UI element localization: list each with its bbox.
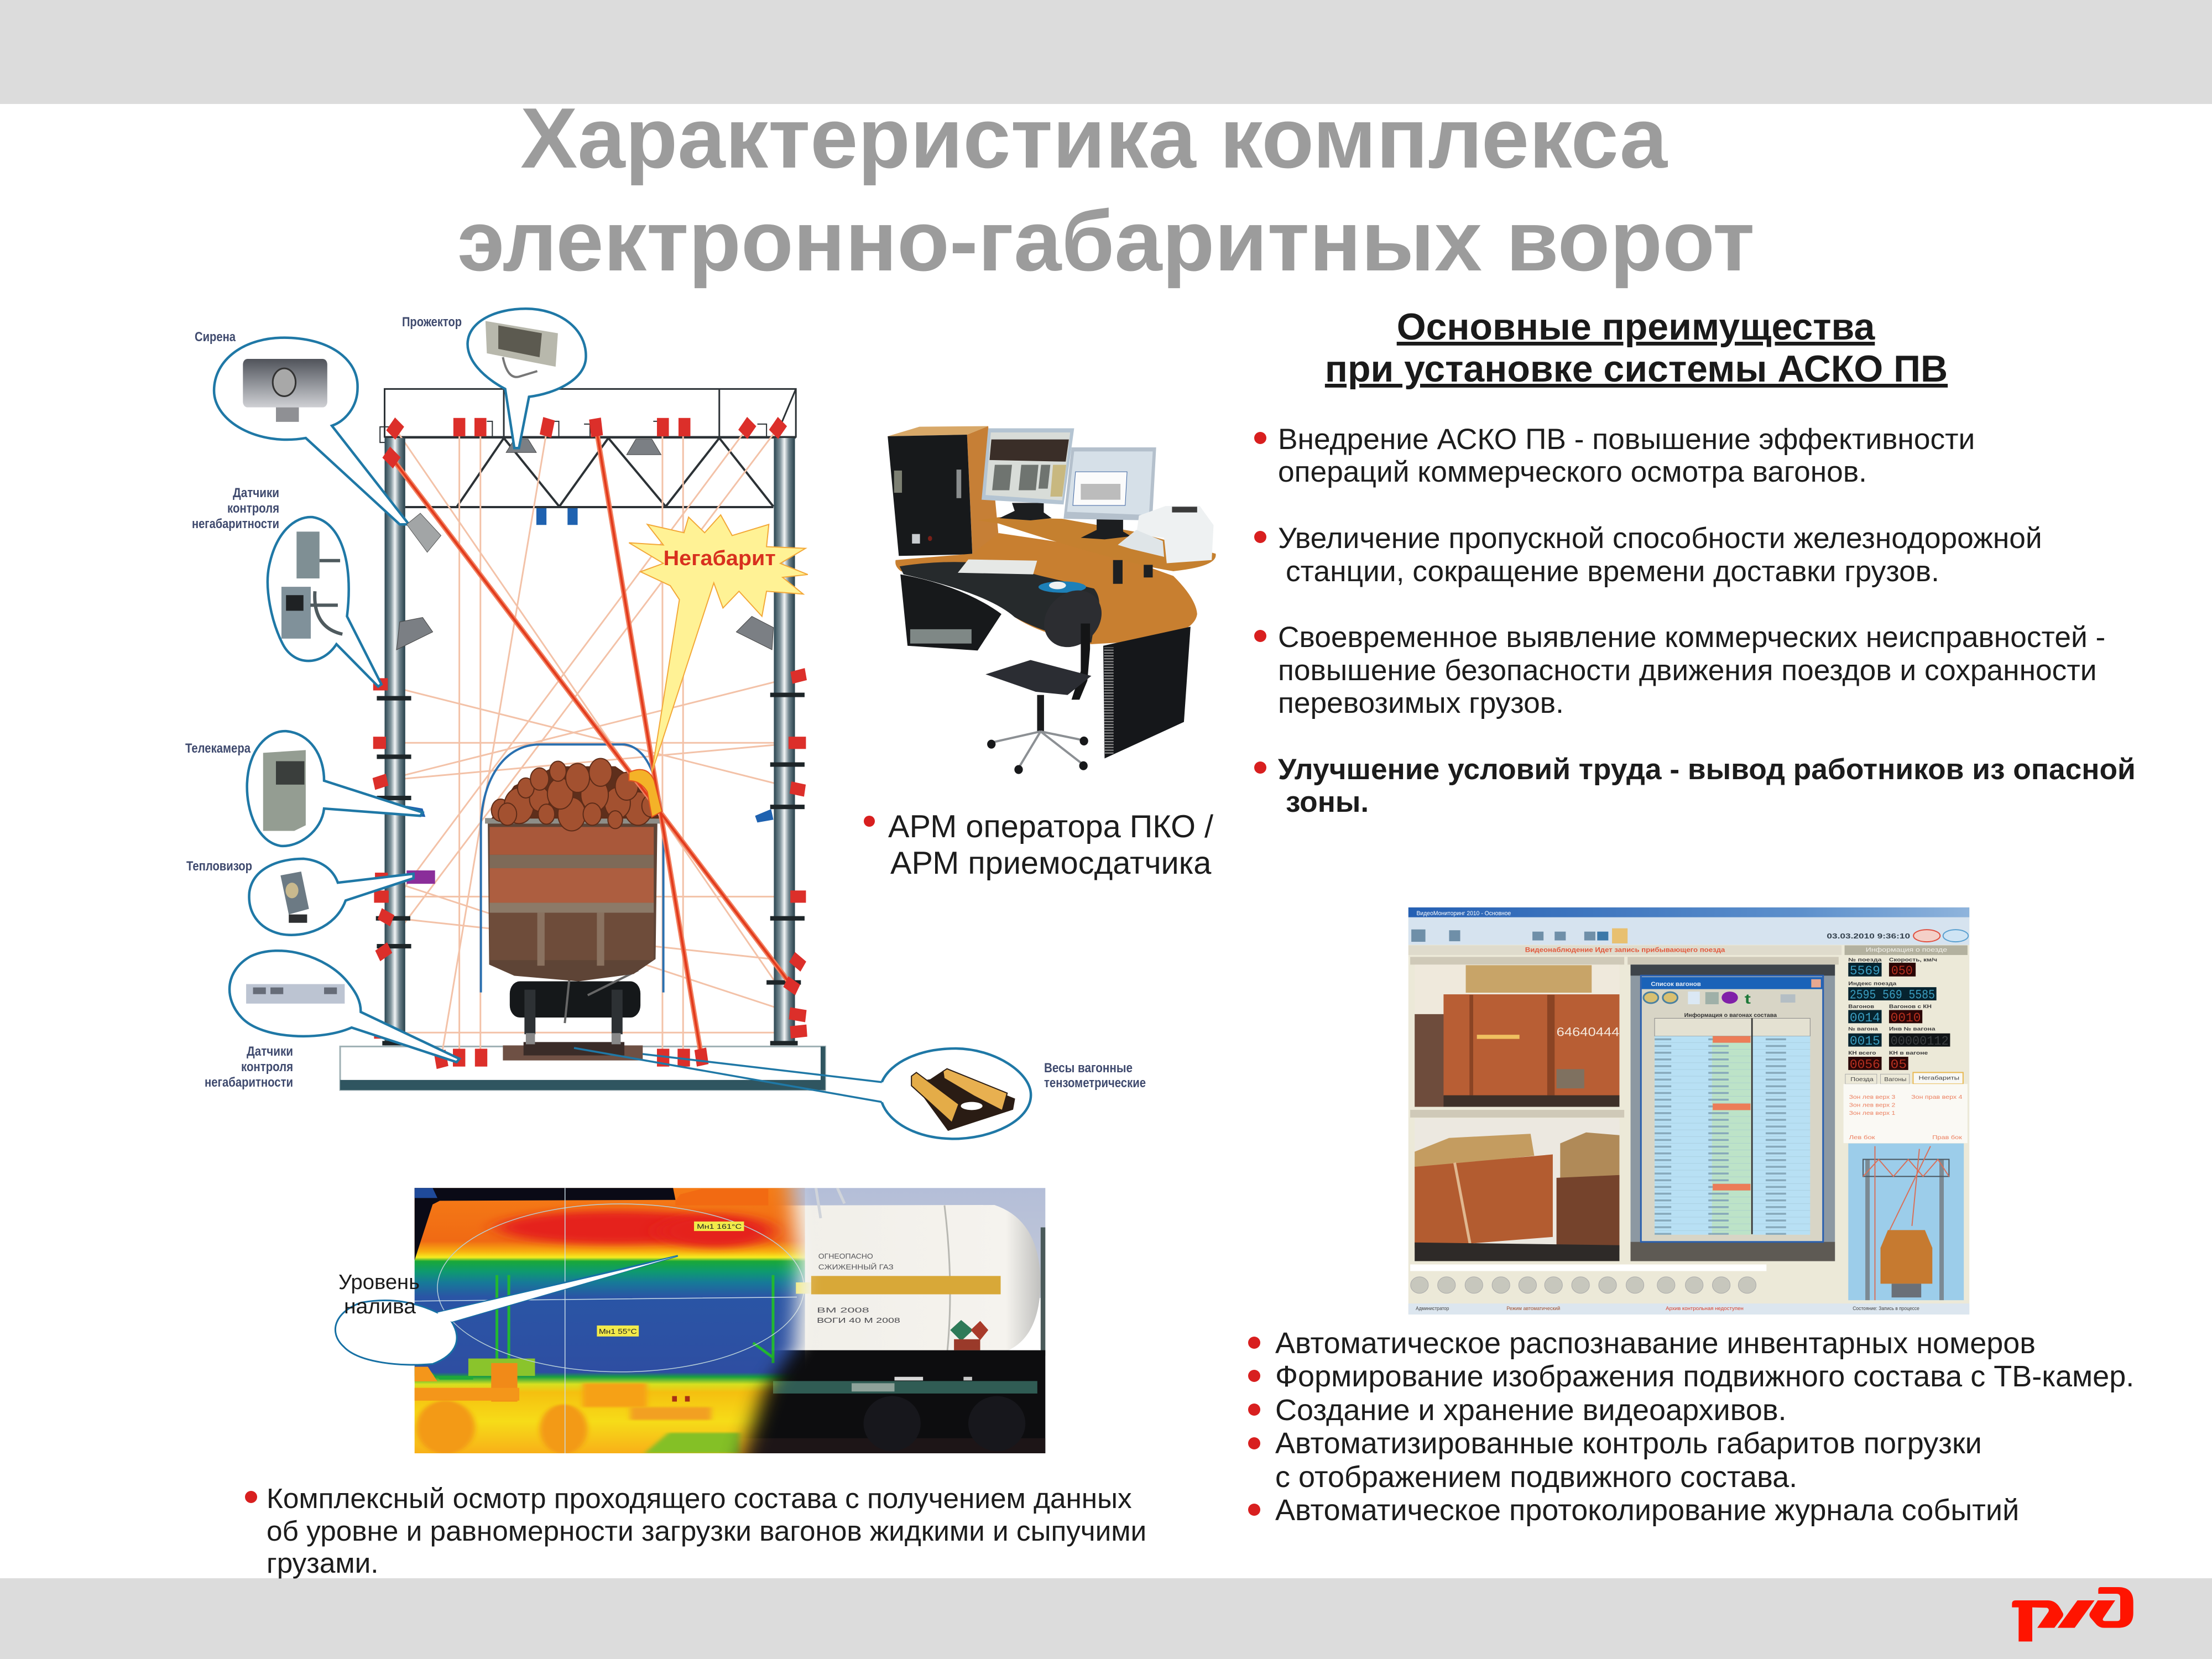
bottom band (0, 1578, 2212, 1659)
top band (0, 0, 2212, 104)
menu and toolbar (1408, 917, 1969, 945)
menu and toolbar: 03.03.2010 9:36:10 (1827, 932, 1910, 940)
workstation caption: АРМ приемосдатчика (890, 846, 1212, 881)
bullet 2 (1254, 522, 2042, 588)
digital counters: 0014 (1850, 1011, 1880, 1025)
printer (1118, 506, 1213, 563)
thermal caption: об уровне и равномерности загрузки вагонов жидкими и сыпучими (267, 1515, 1146, 1547)
callout: siren (214, 338, 441, 552)
callout: weighing scale (882, 1048, 1031, 1139)
software screenshot (1408, 907, 1969, 1314)
counter captions: Инв № вагона (1889, 1026, 1936, 1032)
red banner (1408, 946, 1841, 955)
fill level label: налива (344, 1295, 416, 1318)
counter captions: КН всего (1848, 1050, 1876, 1056)
label: siren: Сирена (195, 330, 236, 345)
mini gantry (1848, 1144, 1964, 1300)
callout: fill level (335, 1256, 678, 1365)
counter captions: № вагона (1848, 1026, 1878, 1032)
digital counters: 05 (1891, 1058, 1907, 1072)
tank car photo: ВМ 2008 (817, 1306, 869, 1314)
label: weighing scale: тензометрические (1044, 1076, 1146, 1091)
status bar: Администратор (1416, 1306, 1449, 1312)
car body (488, 821, 658, 982)
freight car with logs (481, 744, 664, 1044)
bullet 1: операций коммерческого осмотра вагонов. (1278, 456, 1867, 488)
fill level label: Уровень (338, 1271, 420, 1294)
oversize zone captions: Зон лев верх 1 (1849, 1110, 1895, 1116)
bullet 4: Улучшение условий труда - вывод работников из опасной (1278, 753, 2136, 786)
thermal caption (245, 1483, 1146, 1579)
thermal caption: грузами. (267, 1547, 379, 1579)
digital counters: 00000112 (1891, 1035, 1949, 1049)
bullet 3 (1254, 621, 2105, 719)
tabs: Негабариты (1918, 1075, 1959, 1081)
item 4: с отображением подвижного состава. (1275, 1460, 1797, 1494)
label: lower gauge sensors: Датчики (247, 1044, 293, 1059)
thermal view: Мн1 55°C (599, 1328, 637, 1335)
tank car photo: ОГНЕОПАСНО (818, 1252, 873, 1260)
title bar (1408, 907, 1969, 917)
info panel: Информация о поезде (1866, 946, 1947, 953)
bullet 3: повышение безопасности движения поездов и сохранности (1278, 654, 2097, 687)
status bar: Архив контрольная недоступен (1666, 1306, 1744, 1312)
lines to weighing scale (574, 1048, 883, 1102)
label: weighing scale: Весы вагонные (1044, 1061, 1133, 1076)
overhang hot spot (629, 770, 662, 817)
column brackets (376, 693, 805, 1045)
function list (1248, 1327, 2134, 1527)
red laser beams (392, 427, 792, 1057)
wagon list dialog: t (1745, 992, 1751, 1007)
bullet 3: Своевременное выявление коммерческих неисправностей - (1278, 621, 2105, 654)
diagram labels (185, 315, 1146, 1091)
label: upper gauge sensors (192, 486, 279, 531)
monitor 1 (982, 429, 1074, 520)
photo 2 (1410, 1110, 1624, 1261)
status bar: Состояние: Запись в процессе (1853, 1306, 1919, 1312)
oversize zone captions: Зон прав верх 4 (1911, 1094, 1963, 1100)
digital counters (1848, 963, 1950, 1072)
item 4 (1248, 1427, 1982, 1494)
temperature tag top: Мн1 161°C (697, 1223, 742, 1230)
item 5: Автоматическое протоколирование журнала событий (1275, 1494, 2019, 1527)
main desk (895, 533, 1197, 644)
server tower (888, 435, 972, 556)
heading: advantages: Основные преимущества (1397, 306, 1875, 348)
tank car photo (727, 1188, 1045, 1453)
temperature tag bottom (597, 1326, 639, 1337)
thermal camera (406, 870, 435, 884)
callout: gauge sensors upper (268, 517, 382, 686)
window (1408, 907, 1969, 1314)
heading: advantages (1325, 306, 1948, 390)
tabs: Поезда (1850, 1077, 1874, 1083)
counter captions (1848, 957, 1937, 1056)
thin sensor beams (379, 427, 799, 1060)
keyboard and mouse (958, 560, 1086, 593)
bullet 2: Увеличение пропускной способности железнодорожной (1278, 522, 2042, 555)
workstation caption: АРМ оператора ПКО / (888, 809, 1214, 844)
counter captions: № поезда (1848, 957, 1882, 963)
bullet 4: зоны. (1286, 786, 1369, 818)
callout: TV camera (247, 731, 422, 846)
wagon list dialog: Список вагонов (1651, 980, 1701, 988)
truss (380, 389, 796, 507)
bullet 1 (1254, 423, 1975, 488)
bullet 1: Внедрение АСКО ПВ - повышение эффективности (1278, 423, 1975, 456)
label: TV camera: Телекамера (185, 741, 251, 756)
floodlights (397, 439, 774, 650)
bullet 4 (1254, 753, 2136, 818)
thermal view (415, 1188, 811, 1454)
starburst: Негабарит (629, 515, 808, 773)
clearance gauge (481, 744, 664, 993)
red banner: Видеонаблюдение Идет запись прибывающего поезда (1525, 946, 1725, 953)
platform base (340, 1042, 825, 1090)
temperature tag top (694, 1222, 744, 1231)
oversize zone captions: Прав бок (1932, 1135, 1963, 1141)
monitor 2 (1063, 447, 1156, 539)
item 2: Формирование изображения подвижного состава с ТВ-камер. (1275, 1360, 2134, 1393)
label: weighing scale (1044, 1061, 1146, 1091)
digital counters: 0015 (1850, 1035, 1880, 1049)
oversize zone captions: Зон лев верх 3 (1849, 1094, 1896, 1100)
starburst: Негабарит: Негабарит (664, 546, 776, 570)
label: upper gauge sensors: негабаритности (192, 517, 279, 531)
desk inlay (900, 562, 1099, 643)
tank car photo: СЖИЖЕННЫЙ ГАЗ (818, 1263, 894, 1271)
red sensors (373, 417, 807, 1069)
callout: thermal imager (249, 859, 414, 935)
digital counters: 050 (1891, 964, 1913, 978)
thermal image panel (335, 1188, 1045, 1454)
counter captions: Скорость, км/ч (1889, 957, 1937, 963)
label: upper gauge sensors: контроля (227, 501, 279, 516)
info panel (1844, 946, 1968, 1300)
photo 3 behind dialog (1627, 957, 1839, 1261)
blue cameras (406, 508, 774, 822)
fill level label (338, 1271, 420, 1318)
tabs: Вагоны (1884, 1077, 1906, 1083)
label: lower gauge sensors: контроля (241, 1060, 293, 1074)
digital counters: 2595 569 5585 (1850, 988, 1935, 1003)
right pedestal (1103, 627, 1191, 758)
workstation cabinet side (967, 426, 999, 554)
item 4: Автоматизированные контроль габаритов погрузки (1275, 1427, 1982, 1460)
chair (985, 581, 1109, 774)
counter captions: Вагонов (1848, 1004, 1875, 1009)
shelf supports (1113, 560, 1152, 584)
label: upper gauge sensors: Датчики (233, 486, 279, 500)
digital counters: 5569 (1850, 964, 1880, 978)
operator workstation (888, 426, 1216, 774)
item 1: Автоматическое распознавание инвентарных номеров (1275, 1327, 2036, 1360)
wagon list dialog: Информация о вагонах состава (1684, 1012, 1777, 1018)
counter captions: Индекс поезда (1848, 981, 1896, 987)
counter captions: КН в вагоне (1889, 1050, 1928, 1056)
upper shelf (978, 517, 1216, 571)
label: floodlight: Прожектор (402, 315, 462, 330)
photo 1 (1410, 957, 1624, 1107)
bullet 3: перевозимых грузов. (1278, 687, 1564, 719)
workstation caption (864, 809, 1214, 881)
thermal caption: Комплексный осмотр проходящего состава с получением данных (267, 1483, 1132, 1514)
status bar: Режим автоматический (1506, 1306, 1560, 1312)
gantry diagram (214, 309, 825, 1090)
photo 1: 64640444 (1557, 1026, 1619, 1039)
digital counters: 0010 (1891, 1011, 1921, 1025)
oversize zone captions: Зон лев верх 2 (1849, 1102, 1895, 1108)
callout: gauge sensors lower (229, 951, 460, 1062)
label: lower gauge sensors: негабаритности (205, 1075, 293, 1090)
logo: RZD (2012, 1587, 2133, 1641)
label: lower gauge sensors (205, 1044, 293, 1090)
title bar: ВидеоМониторинг 2010 - Основное (1417, 910, 1511, 916)
logs (492, 758, 660, 831)
digital counters: 0056 (1850, 1058, 1880, 1072)
left pedestal (900, 575, 1001, 650)
title: электронно-габаритных ворот (457, 193, 1755, 289)
title: Характеристика комплекса (520, 90, 1668, 186)
heading: advantages: при установке системы АСКО ПВ (1325, 348, 1948, 390)
playback buttons (1410, 1265, 1766, 1293)
advantages list (1254, 423, 2136, 818)
tabs (1844, 1072, 1968, 1143)
left column (384, 438, 405, 1045)
bogie (510, 964, 640, 1044)
status bar (1408, 1303, 1969, 1314)
item 3: Создание и хранение видеоархивов. (1275, 1394, 1787, 1427)
oversize zone captions: Лев бок (1849, 1135, 1875, 1141)
callout: floodlight (468, 309, 586, 448)
title (457, 90, 1755, 289)
right column (774, 438, 795, 1045)
tank car photo: ВОГИ 40 М 2008 (817, 1316, 900, 1324)
oversize zone captions (1849, 1094, 1963, 1141)
counter captions: Вагонов с КН (1889, 1004, 1932, 1009)
label: thermal imager: Тепловизор (186, 859, 252, 874)
bullet 2: станции, сокращение времени доставки грузов. (1286, 555, 1939, 588)
wagon list dialog (1641, 975, 1823, 1242)
